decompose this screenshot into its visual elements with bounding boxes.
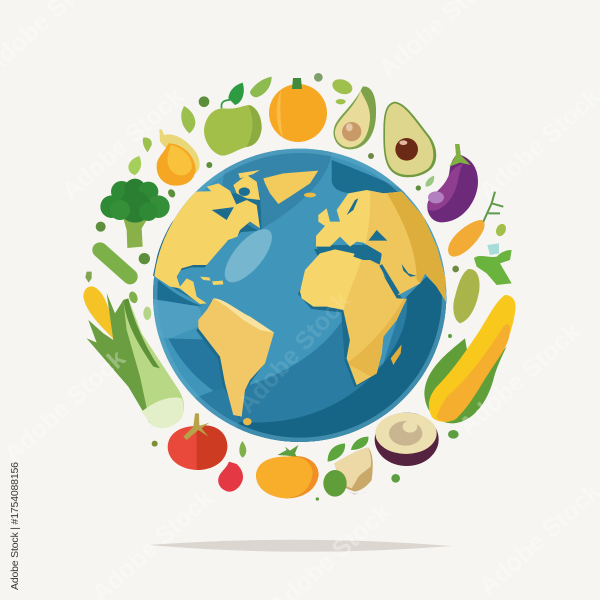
pear [157,129,200,186]
carrot [448,192,503,257]
globe [150,149,450,450]
south america highlight [213,298,274,333]
tierra del fuego [243,418,252,425]
pumpkin [269,78,327,142]
watermark: Adobe Stock [233,286,356,419]
produce upper left [96,77,272,277]
credit text: Adobe Stock | #1754088156 [9,462,21,590]
red sea [381,265,398,294]
ground shadow [148,540,452,552]
celery [87,293,184,428]
land shadows [153,194,405,419]
eggplant [427,144,478,222]
globe ocean base [153,149,446,442]
leaves pair [328,437,368,462]
madagascar [391,344,402,365]
infographic: globe surrounded by produce [10,73,516,590]
ocean bands [150,150,450,450]
seas [347,198,417,277]
produce upper right [314,73,512,323]
large corn with husk [424,295,516,423]
watermark: Adobe Stock [0,344,131,468]
highlight [217,222,280,290]
europe asia africa [300,190,446,385]
seeds [96,96,212,264]
watermark: Adobe Stock [454,317,586,441]
yellow corn [83,286,125,352]
zucchini with leaf [453,243,512,323]
south america [198,298,274,417]
produce lower right [256,295,516,501]
orange tomato [256,445,319,498]
greenland [263,171,318,204]
radish [218,462,243,492]
cucumber [100,250,130,277]
green apple [204,83,262,156]
green ball [323,470,347,497]
seeds and leaves [85,272,246,458]
hudson detail [239,187,250,196]
caribbean islands [200,277,223,285]
seeds [316,334,459,501]
produce left [83,272,246,492]
land shading [343,183,450,390]
north america [150,190,260,304]
mediterranean [316,245,383,263]
potato [334,447,373,495]
cut fruit [375,413,439,466]
broccoli [100,179,170,248]
arctic islands [207,170,260,200]
small avocado [333,87,376,149]
large avocado [383,102,436,177]
small island [304,193,316,197]
leaves [128,77,272,175]
small leaves and dots [314,73,508,272]
tomato [168,413,227,470]
watermark: Adobe Stock [57,82,189,206]
